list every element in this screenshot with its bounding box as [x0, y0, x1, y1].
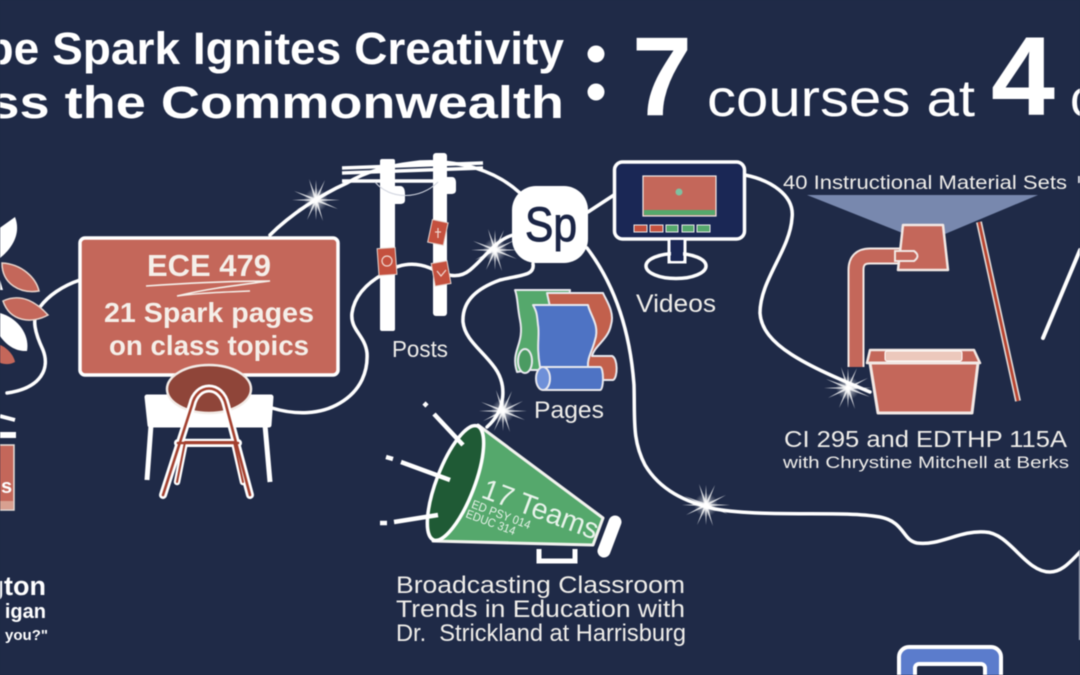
left course caption fragment: you?"	[5, 627, 48, 644]
left plant leaves	[0, 217, 48, 364]
icon: overhead projector	[807, 195, 1038, 413]
course caption: CI 295 and EDTHP 115A	[782, 426, 1069, 472]
monitor stand	[669, 240, 685, 262]
icon: pointer	[979, 222, 1018, 401]
heading scribble underline	[146, 281, 270, 296]
label: Pages: Pages	[534, 397, 604, 424]
megaphone handle	[539, 549, 575, 561]
title separator dots	[588, 46, 604, 100]
stat: 7 courses at 4 campuses: 4	[991, 14, 1055, 139]
right edge label speck	[1078, 176, 1080, 183]
blue scroll	[533, 305, 596, 367]
megaphone end cap	[604, 522, 615, 551]
easel or stand line	[1043, 250, 1080, 338]
label: Posts: Posts	[392, 336, 448, 362]
icon: utility poles with posts	[342, 153, 483, 331]
desk	[147, 397, 271, 482]
sparkles	[292, 179, 872, 526]
megaphone text: 17 Teams	[478, 474, 603, 546]
megaphone opening	[416, 419, 495, 547]
playlist thumbnails	[634, 225, 710, 232]
desk and chair	[147, 365, 271, 495]
title	[0, 23, 564, 128]
green scroll	[515, 290, 570, 372]
left classroom item fragment: s	[1, 476, 12, 498]
megaphone caption: Broadcasting Classroom	[396, 572, 685, 599]
board text: on class topics	[109, 330, 309, 361]
megaphone caption: Dr. Strickland at Harrisburg	[396, 620, 686, 647]
cross arms	[342, 163, 483, 181]
projector base lid	[867, 350, 980, 363]
stat: 7 courses at 4 campuses	[632, 14, 1080, 139]
red scroll	[547, 293, 617, 380]
label: Videos: Videos	[636, 290, 716, 318]
board text: 21 Spark pages	[104, 297, 314, 328]
connecting curves	[7, 162, 1080, 572]
label: instructional material sets: 40 Instructional Material Sets	[783, 172, 1067, 194]
icon: page scrolls	[515, 290, 617, 390]
right edge vertical line	[1078, 550, 1080, 640]
video screen	[643, 176, 716, 216]
icon: Adobe Spark logo: Sp	[525, 199, 577, 252]
projector arm	[856, 256, 917, 367]
icon: Adobe Spark logo	[512, 186, 588, 263]
stat: 7 courses at 4 campuses: courses at	[707, 70, 976, 128]
megaphone text	[464, 471, 603, 565]
projector light beam	[807, 195, 1038, 234]
megaphone caption	[396, 572, 686, 647]
chair back	[167, 365, 251, 413]
megaphone text: ED PSY 014	[470, 497, 533, 532]
megaphone text: EDUC 314	[464, 507, 518, 538]
stat: 7 courses at 4 campuses: 7	[632, 14, 692, 139]
sagging wire	[375, 182, 438, 196]
blue roll	[543, 367, 603, 390]
sound lines	[380, 403, 463, 523]
panel: ECE 479 board	[80, 238, 338, 375]
left classroom item fragment	[0, 416, 16, 510]
course caption: CI 295 and EDTHP 115A: with Chrystine Mitchell at Berks	[782, 454, 1069, 472]
icon: blue panel fragment at bottom	[899, 647, 1001, 675]
left course caption fragment	[0, 571, 48, 644]
megaphone cone	[433, 425, 603, 545]
projector head	[898, 225, 948, 270]
poles	[380, 153, 456, 331]
projector base	[870, 363, 978, 413]
board heading: ECE 479	[147, 248, 271, 283]
post tags	[377, 220, 451, 286]
megaphone caption: Trends in Education with	[396, 596, 685, 623]
course caption: CI 295 and EDTHP 115A: CI 295 and EDTHP 115A	[784, 426, 1068, 452]
icon: megaphone	[380, 403, 615, 565]
board text	[104, 297, 314, 361]
chair frame	[163, 388, 250, 495]
left course caption fragment: igan	[5, 601, 46, 623]
icon: video monitor	[614, 162, 744, 278]
